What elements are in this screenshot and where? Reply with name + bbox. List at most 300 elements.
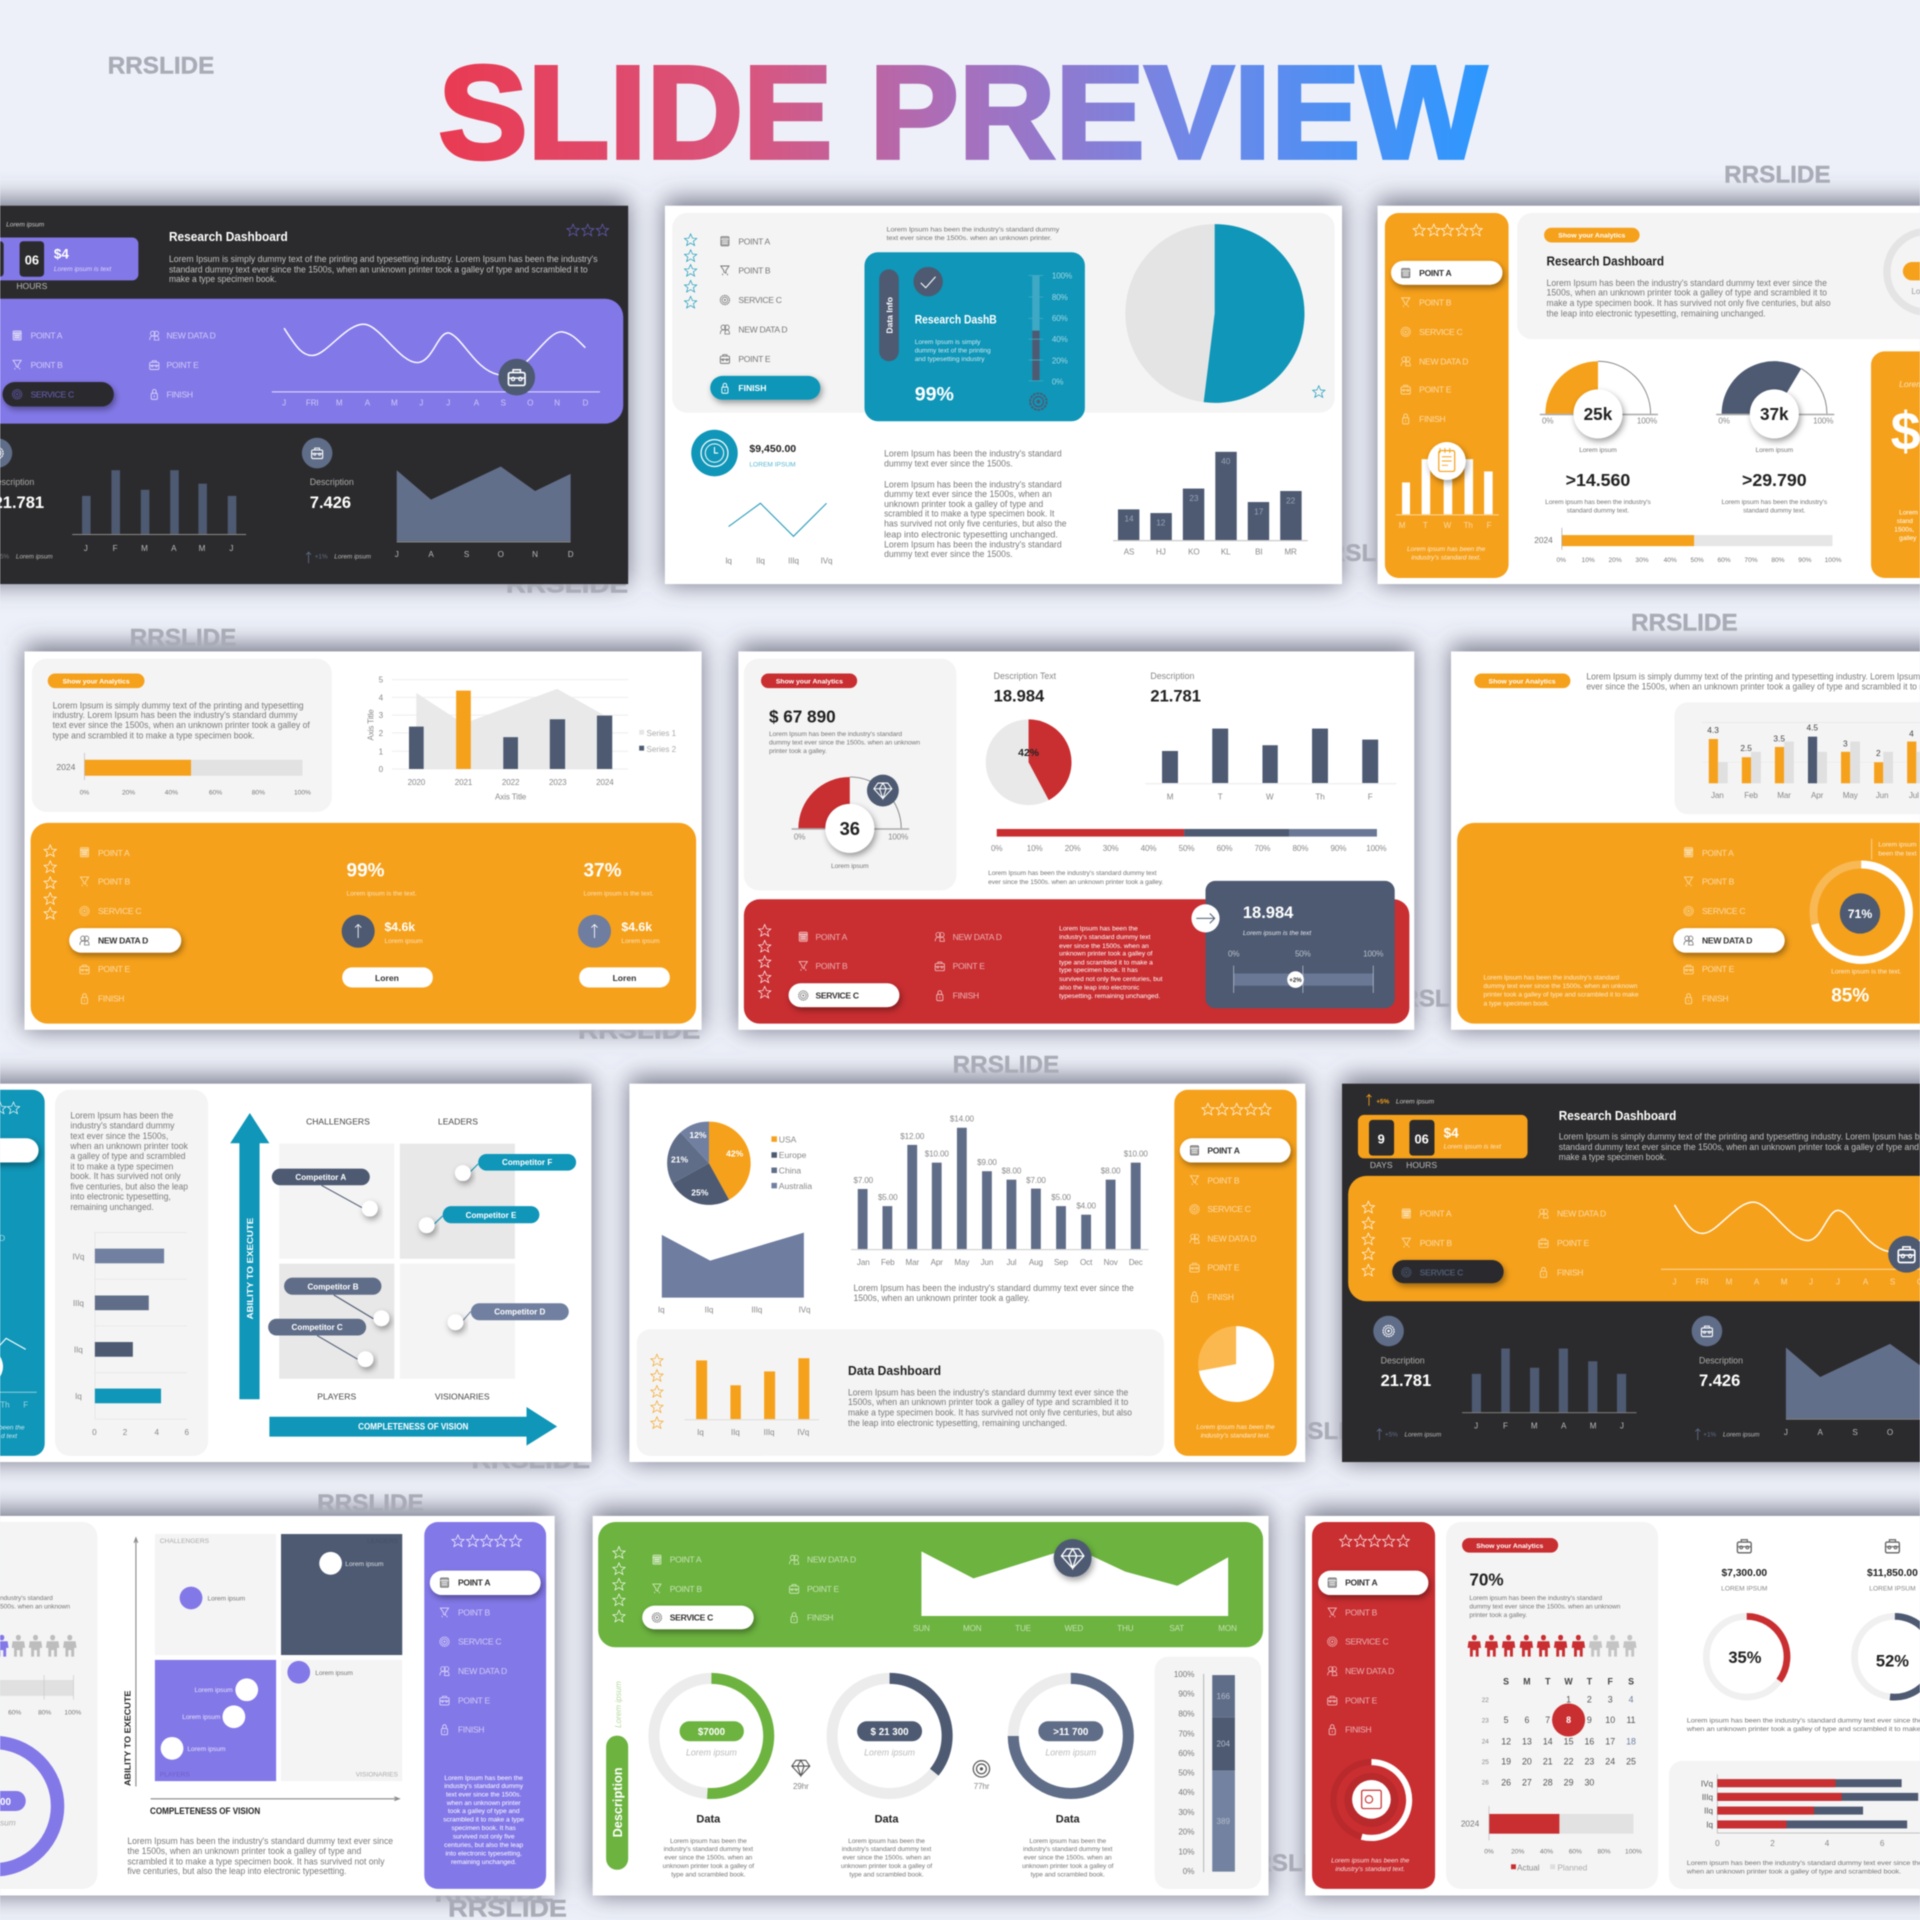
calendar: 23 bbox=[1584, 1756, 1594, 1766]
purple sidebar: scrambled it to make a type bbox=[443, 1817, 524, 1824]
green panel: NEW DATA D bbox=[807, 1555, 856, 1565]
text and horizontal bars card: a galley of type and scrambled bbox=[70, 1151, 186, 1161]
axes: ABILITY TO EXECUTE bbox=[122, 1690, 132, 1786]
orange sidebar: POINT E bbox=[1207, 1263, 1240, 1273]
bar chart: 14 bbox=[1124, 514, 1134, 524]
area chart: Iq bbox=[658, 1306, 664, 1315]
donut: >11 700: unknown printer took a galley of bbox=[1022, 1863, 1114, 1870]
progress bar bbox=[1534, 528, 1842, 564]
data dashboard card: IIIq bbox=[764, 1428, 774, 1437]
area chart: S bbox=[1852, 1428, 1858, 1437]
calendar: 25 bbox=[1626, 1756, 1636, 1766]
quadrants: VISIONARIES bbox=[356, 1772, 399, 1779]
donut: $7000: Lorem ipsum has been the bbox=[670, 1838, 747, 1845]
competitor B bbox=[284, 1278, 389, 1326]
title: SLIDE PREVIEW bbox=[438, 39, 1487, 187]
description bbox=[127, 1836, 393, 1876]
calendar: 7 bbox=[1545, 1715, 1550, 1725]
stat 37%: 37% bbox=[583, 861, 622, 882]
panel: slide 8 data dashboard bbox=[629, 1084, 1305, 1462]
donut: $7000: type and scrambled book. bbox=[671, 1871, 746, 1878]
monthly bar chart: $5.00 bbox=[878, 1193, 898, 1202]
calendar: 23 bbox=[1482, 1717, 1489, 1724]
calendar: 19 bbox=[1501, 1756, 1511, 1766]
text and horizontal bars card: it to make a type specimen bbox=[70, 1161, 173, 1171]
watermarks: RRSLIDE bbox=[1237, 1850, 1343, 1877]
gauge 37k: Lorem ipsum has been the industry's bbox=[1721, 499, 1828, 506]
gauge 37k bbox=[1716, 361, 1834, 514]
description: make a type specimen book. bbox=[169, 274, 277, 284]
bar chart: M bbox=[1531, 1421, 1538, 1430]
area chart: IIIq bbox=[751, 1306, 762, 1315]
horizontal stacked bars card bbox=[1669, 1761, 1920, 1889]
area chart bbox=[658, 1233, 810, 1315]
analytics card: text ever since the 1500s, when an unknown printer took a galley of bbox=[53, 720, 310, 730]
analytics card: Lorem Ipsum has been the industry's standard bbox=[769, 731, 902, 738]
donut chart: 85% bbox=[1831, 986, 1869, 1007]
stacked column chart: 166 bbox=[1217, 1692, 1231, 1701]
calendar: 11 bbox=[1626, 1715, 1636, 1725]
combo chart: Axis Title bbox=[495, 793, 527, 802]
monthly bar chart: $10.00 bbox=[925, 1150, 949, 1159]
legend: China bbox=[779, 1165, 801, 1175]
orange panel: NEW DATA D bbox=[1702, 935, 1752, 945]
area chart: MON bbox=[963, 1624, 982, 1633]
stacked column chart: 204 bbox=[1217, 1740, 1231, 1749]
calendar bbox=[1482, 1676, 1636, 1787]
red panel: POINT E bbox=[953, 961, 985, 971]
line chart: A bbox=[1754, 1277, 1760, 1286]
safe donut bbox=[1333, 1762, 1409, 1838]
calendar card: dummy text ever since the 1500s. when an unknown bbox=[1469, 1603, 1621, 1610]
text and horizontal bars card: Iq bbox=[75, 1392, 82, 1401]
progress bar: 60% bbox=[1569, 1848, 1582, 1855]
line chart: J bbox=[282, 398, 286, 407]
stacked progress bar: 100% bbox=[1366, 844, 1386, 853]
purple sidebar: SERVICE C bbox=[458, 1637, 501, 1647]
stat with clock icon: LOREM IPSUM bbox=[749, 462, 796, 469]
red sidebar: POINT E bbox=[1345, 1695, 1378, 1705]
dark card: 18.984 bbox=[1243, 903, 1294, 922]
teal sidebar bbox=[0, 1090, 45, 1456]
menu: FINISH bbox=[738, 383, 766, 393]
progress bar: 2024 bbox=[1461, 1818, 1480, 1828]
green panel: POINT B bbox=[670, 1584, 702, 1594]
analytics card: 100% bbox=[888, 832, 908, 841]
red sidebar: POINT A bbox=[1345, 1578, 1377, 1588]
orange panel: Lorem Ipsum has been the industry's standard bbox=[1483, 975, 1620, 982]
stat 7.426 bbox=[302, 438, 371, 563]
teal card: Research DashB bbox=[915, 313, 997, 326]
line chart: A bbox=[1863, 1277, 1869, 1286]
donut: $7000: $7000 bbox=[698, 1727, 726, 1738]
data dashboard card: make a type specimen book. It has survived not only five centuries, but also bbox=[848, 1408, 1132, 1418]
orange sidebar bbox=[1174, 1090, 1297, 1456]
green panel: FINISH bbox=[807, 1613, 833, 1623]
gauge 25k: Lorem ipsum has been the industry's bbox=[1545, 499, 1652, 506]
stars bbox=[684, 234, 697, 308]
chart caption bbox=[853, 1283, 1134, 1303]
sidebar: NEW DATA D bbox=[1419, 356, 1468, 366]
gauge 25k: >14.560 bbox=[1566, 470, 1630, 490]
gauge 37k: >29.790 bbox=[1742, 470, 1807, 490]
combo chart: Axis Title bbox=[366, 709, 375, 740]
stacked column chart: 80% bbox=[1178, 1709, 1194, 1718]
area chart: D bbox=[568, 550, 574, 559]
combo chart: 4 bbox=[379, 693, 384, 702]
calendar: 16 bbox=[1584, 1736, 1594, 1746]
progress bar: 60% bbox=[1717, 557, 1731, 564]
data dashboard card: IIq bbox=[731, 1428, 740, 1437]
line chart bbox=[725, 503, 832, 565]
stat with clock icon bbox=[691, 430, 796, 476]
orange panel: POINT B bbox=[1702, 877, 1735, 887]
arrow: ability to execute: ABILITY TO EXECUTE bbox=[245, 1217, 255, 1319]
red panel: SERVICE C bbox=[816, 991, 859, 1001]
calendar: 5 bbox=[1504, 1715, 1509, 1725]
calendar: T bbox=[1545, 1676, 1551, 1686]
stats: 21.781 bbox=[1150, 687, 1201, 706]
quadrants: Lorem ipsum bbox=[345, 1561, 384, 1568]
panel: slide 7 competitor quadrant bbox=[0, 1084, 591, 1462]
stat 21.781: 21.781 bbox=[1381, 1371, 1431, 1390]
top panel: Lorem Ipsum has been the industry's standard dummy text ever since the bbox=[1547, 278, 1827, 288]
line chart: IIIq bbox=[788, 556, 799, 565]
teal card: 40% bbox=[1052, 335, 1068, 344]
monthly bar chart: $12.00 bbox=[900, 1132, 925, 1141]
description bbox=[1559, 1131, 1920, 1162]
grouped bar chart: 2 bbox=[1876, 748, 1881, 758]
quadrants: LEADERS bbox=[367, 1538, 399, 1545]
monthly bar chart: Sep bbox=[1054, 1258, 1069, 1267]
orange panel bbox=[1348, 1176, 1920, 1301]
analytics card: 36 bbox=[840, 818, 860, 839]
combo chart: Series 1 bbox=[647, 729, 677, 738]
stacked progress bar: 70% bbox=[1255, 844, 1270, 853]
purple sidebar: text ever since the 1500s. bbox=[446, 1791, 521, 1798]
calendar: 20 bbox=[1522, 1756, 1532, 1766]
competitor A bbox=[272, 1169, 378, 1217]
stacked column chart: 0% bbox=[1183, 1867, 1194, 1876]
donut chart: been the text bbox=[1878, 850, 1917, 857]
bar chart: Th bbox=[1315, 793, 1325, 802]
calendar: 2 bbox=[1587, 1695, 1592, 1705]
body text bbox=[884, 449, 1067, 559]
pie chart bbox=[986, 719, 1072, 805]
watermarks: RRSLIDE bbox=[435, 1881, 553, 1908]
pie chart bbox=[667, 1122, 751, 1205]
text and horizontal bars card: text ever since the 1500s, bbox=[70, 1131, 168, 1141]
orange card: 1500s, bbox=[1894, 526, 1914, 533]
donut chart bbox=[1813, 839, 1917, 1007]
watermarks: RRSLIDE bbox=[1310, 540, 1417, 567]
analytics card: industry. Lorem Ipsum has been the industry's standard dummy bbox=[53, 710, 298, 720]
calendar: 25 bbox=[1482, 1759, 1489, 1766]
stacked column chart: 30% bbox=[1178, 1808, 1194, 1817]
countdown box: $4 bbox=[1444, 1126, 1459, 1141]
combo chart: 2020 bbox=[408, 778, 426, 787]
bar chart: 40 bbox=[1221, 456, 1231, 466]
monthly bar chart: $14.00 bbox=[950, 1115, 974, 1124]
people pictogram bbox=[1468, 1635, 1637, 1657]
gauge 37k: 0% bbox=[1718, 417, 1730, 426]
donut: >11 700: >11 700 bbox=[1053, 1727, 1089, 1738]
analytics card: $ 67 890 bbox=[769, 706, 836, 726]
axes: COMPLETENESS OF VISION bbox=[150, 1806, 260, 1816]
stacked column chart: 50% bbox=[1178, 1769, 1194, 1778]
purple sidebar: NEW DATA D bbox=[458, 1666, 507, 1676]
monthly bar chart: Jul bbox=[1006, 1258, 1017, 1267]
calendar: 21 bbox=[1543, 1756, 1553, 1766]
countdown box: $4 bbox=[54, 246, 69, 261]
monthly bar chart: $7.00 bbox=[1026, 1176, 1046, 1185]
arrow: completeness of vision: COMPLETENESS OF VISION bbox=[358, 1422, 468, 1432]
grouped bar chart: 2.5 bbox=[1740, 743, 1752, 753]
calendar: 24 bbox=[1605, 1756, 1615, 1766]
area chart: J bbox=[1784, 1428, 1788, 1437]
data dashboard card: IVq bbox=[797, 1428, 809, 1437]
calendar: 29 bbox=[1564, 1777, 1574, 1787]
intro text bbox=[887, 226, 1060, 242]
orange panel: POINT E bbox=[98, 964, 131, 974]
data dashboard card: Data Dashboard bbox=[848, 1363, 941, 1378]
line chart: Iq bbox=[725, 556, 732, 565]
stat 7.426: Lorem ipsum bbox=[1723, 1431, 1760, 1438]
teal card: 20% bbox=[1052, 357, 1068, 366]
gauge 25k: Lorem ipsum bbox=[1579, 447, 1617, 454]
bar chart: M bbox=[1590, 1421, 1597, 1430]
menu: NEW DATA D bbox=[167, 331, 216, 341]
panel: slide 4 analytics orange bbox=[24, 651, 702, 1030]
stat 37% bbox=[578, 861, 670, 988]
watermarks: RRSLIDE bbox=[108, 52, 214, 79]
countdown box: Lorem ipsum is text bbox=[54, 266, 112, 273]
teal sidebar: F bbox=[23, 1401, 28, 1410]
menu: POINT A bbox=[738, 236, 770, 246]
line chart: A bbox=[474, 398, 480, 407]
stacked progress bar: 40% bbox=[1141, 844, 1156, 853]
calendar: 3 bbox=[1608, 1695, 1613, 1705]
orange sidebar: Lorem ipsum has been the bbox=[1196, 1424, 1275, 1431]
purple sidebar: when an unknown printer bbox=[446, 1800, 521, 1807]
description: Lorem ipsum has been the industry's standard dummy text ever since the 1500s. bbox=[1687, 1717, 1920, 1724]
stacked column chart: 60% bbox=[1178, 1749, 1194, 1758]
calendar: 22 bbox=[1482, 1697, 1489, 1704]
body text: Lorem Ipsum has been the industry's standard bbox=[884, 539, 1062, 549]
line chart: J bbox=[446, 398, 450, 407]
competitor A: Competitor A bbox=[295, 1173, 346, 1182]
monthly bar chart: $10.00 bbox=[1124, 1150, 1148, 1159]
grouped bar chart: Jun bbox=[1876, 791, 1888, 800]
stat $11,850.00 bbox=[1867, 1540, 1918, 1593]
sidebar: POINT A bbox=[1419, 268, 1452, 278]
axes bbox=[122, 1538, 399, 1816]
text and horizontal bars card: IVq bbox=[72, 1252, 84, 1261]
calendar card: Lorem ipsum has been the industry's standard bbox=[1469, 1595, 1602, 1602]
monthly bar chart: Apr bbox=[931, 1258, 943, 1267]
red panel: type specimen book. It has bbox=[1059, 967, 1139, 974]
panel: slide 6 orange grouped bars bbox=[1451, 651, 1920, 1030]
left card bbox=[0, 1522, 97, 1889]
tag: Show your Analytics bbox=[1489, 678, 1556, 685]
orange panel: dummy text ever since the 1500s. when an unknown bbox=[1483, 983, 1638, 990]
orange panel: POINT B bbox=[1420, 1238, 1452, 1248]
analytics card: Show your Analytics bbox=[776, 678, 843, 685]
progress bar: 10% bbox=[1582, 557, 1595, 564]
donut: >11 700 bbox=[1013, 1678, 1128, 1878]
dark card: 100% bbox=[1363, 949, 1383, 958]
pie chart bbox=[1125, 224, 1304, 403]
top panel: make a type specimen book. It has survived not only five centuries, but also bbox=[1547, 298, 1831, 308]
progress bar: 70% bbox=[1744, 557, 1758, 564]
line chart: O bbox=[527, 398, 533, 407]
sidebar: SERVICE C bbox=[1419, 327, 1463, 337]
monthly bar chart: Mar bbox=[905, 1258, 919, 1267]
progress bar: 0% bbox=[1556, 557, 1566, 564]
purple sidebar: into electronic typesetting, bbox=[445, 1850, 522, 1857]
menu: SERVICE C bbox=[31, 389, 74, 399]
text and horizontal bars card: remaining unchanged. bbox=[70, 1202, 154, 1212]
calendar: 10 bbox=[1605, 1715, 1615, 1725]
analytics card: 60% bbox=[209, 790, 222, 797]
grouped bar chart: 3 bbox=[1843, 738, 1848, 748]
stacked progress bar: Lorem Ipsum has been the industry's standard dummy text bbox=[988, 870, 1157, 877]
stat 99%: Lorem ipsum is the text. bbox=[347, 891, 417, 898]
combo chart: 3 bbox=[379, 711, 384, 720]
body text: dummy text ever since the 1500s. bbox=[884, 549, 1013, 559]
orange panel: NEW DATA D bbox=[98, 935, 148, 945]
grouped bar chart: Feb bbox=[1744, 791, 1758, 800]
grouped bar chart: 3.5 bbox=[1773, 733, 1785, 743]
combo chart: 1 bbox=[379, 747, 384, 756]
stat 7.426: Lorem ipsum bbox=[334, 553, 371, 560]
donut: $21 300: ever since the 1500s. when an bbox=[843, 1854, 931, 1861]
line chart: J bbox=[1673, 1277, 1677, 1286]
gauge 25k: 25k bbox=[1584, 404, 1613, 424]
purple sidebar: took a galley of type and bbox=[448, 1808, 520, 1815]
quadrants: VISIONARIES bbox=[435, 1392, 490, 1402]
orange panel: printer took a galley of type and scrambled it to make bbox=[1483, 992, 1639, 999]
horizontal stacked bars card: Iq bbox=[1706, 1821, 1713, 1830]
area chart: O bbox=[498, 550, 504, 559]
analytics card: dummy text ever since the 1500s. when an unknown bbox=[769, 739, 920, 746]
ring 35%: 35% bbox=[1728, 1648, 1762, 1667]
orange panel: SERVICE C bbox=[1702, 906, 1745, 916]
analytics card: printer took a galley. bbox=[769, 748, 827, 755]
area chart: THU bbox=[1117, 1624, 1134, 1633]
stat 7.426: 7.426 bbox=[310, 493, 351, 512]
stat 7.426: +1% bbox=[1703, 1431, 1717, 1438]
donut: $7000: unknown printer took a galley of bbox=[663, 1863, 754, 1870]
text and horizontal bars card: IIIq bbox=[73, 1299, 84, 1308]
stat 21.781 bbox=[1373, 1316, 1441, 1440]
pie chart: 21% bbox=[671, 1155, 689, 1165]
progress bar: 0% bbox=[1484, 1848, 1494, 1855]
description: scrambled it to make a type specimen book. It has survived not only bbox=[127, 1856, 385, 1866]
grouped bar chart: Apr bbox=[1811, 791, 1824, 800]
gauge 25k: 0% bbox=[1542, 417, 1553, 426]
stat 37%: Lorem ipsum bbox=[621, 938, 660, 945]
teal card: and typesetting industry bbox=[915, 356, 985, 363]
body text: unknown printer took a galley of type and bbox=[884, 499, 1043, 509]
icon: target 77hr bbox=[973, 1761, 990, 1791]
bar chart bbox=[1146, 729, 1397, 802]
menu: POINT A bbox=[31, 331, 63, 341]
stacked column chart: 40% bbox=[1178, 1788, 1194, 1797]
combo chart: 2021 bbox=[455, 778, 473, 787]
grouped bar chart: 4 bbox=[1909, 729, 1914, 739]
horizontal stacked bars card: IIq bbox=[1704, 1806, 1713, 1815]
sidebar: M bbox=[1399, 521, 1406, 530]
monthly bar chart bbox=[851, 1115, 1149, 1267]
donut chart: Lorem ipsum is the text. bbox=[1831, 968, 1902, 975]
teal card: 80% bbox=[1052, 293, 1068, 302]
red sidebar: NEW DATA D bbox=[1345, 1666, 1394, 1676]
stars bbox=[567, 224, 609, 236]
red sidebar: POINT B bbox=[1345, 1608, 1378, 1618]
combo chart: 0 bbox=[379, 765, 384, 774]
line chart: M bbox=[336, 398, 343, 407]
description bbox=[1686, 1717, 1920, 1733]
bar chart: 12 bbox=[1156, 517, 1166, 527]
green panel: POINT E bbox=[807, 1584, 839, 1594]
calendar: 27 bbox=[1522, 1777, 1532, 1787]
calendar card bbox=[1446, 1522, 1658, 1889]
panel: slide 11 green donuts bbox=[593, 1516, 1269, 1896]
ring 52% bbox=[1854, 1616, 1920, 1697]
bar chart bbox=[72, 470, 246, 553]
heading: Research Dashboard bbox=[169, 229, 288, 244]
calendar: 14 bbox=[1543, 1736, 1553, 1746]
sidebar: industry's standard text. bbox=[1411, 555, 1481, 562]
calendar: 15 bbox=[1564, 1736, 1574, 1746]
text and horizontal bars card: five centuries, but also the leap bbox=[70, 1182, 188, 1192]
calendar: 26 bbox=[1482, 1780, 1489, 1787]
line chart: M bbox=[1781, 1277, 1788, 1286]
progress bar: Actual bbox=[1517, 1863, 1540, 1872]
donut: $7000 bbox=[654, 1678, 769, 1878]
grouped bar chart bbox=[1674, 702, 1920, 814]
horizontal stacked bars card: when an unknown printer took a galley of type and scrambled book. bbox=[1686, 1868, 1901, 1875]
purple sidebar: industry's standard dummy bbox=[444, 1783, 524, 1790]
text and horizontal bars card: 2 bbox=[123, 1428, 128, 1437]
bar chart bbox=[1113, 452, 1308, 557]
donut: $21 300: $ 21 300 bbox=[871, 1727, 909, 1738]
text and horizontal bars card: industry's standard dummy bbox=[70, 1120, 175, 1130]
analytics card: 80% bbox=[252, 790, 265, 797]
stat 99%: Lorem ipsum bbox=[384, 938, 423, 945]
bar chart bbox=[1462, 1349, 1637, 1430]
countdown box: 06 bbox=[1414, 1132, 1429, 1147]
area chart: IIq bbox=[705, 1306, 713, 1315]
progress bar: 80% bbox=[1597, 1848, 1611, 1855]
bar chart: A bbox=[171, 544, 177, 553]
donut: >11 700: industry's standard dummy text bbox=[1023, 1846, 1113, 1853]
monthly bar chart: Feb bbox=[881, 1258, 895, 1267]
body text: Lorem Ipsum has been the industry's standard bbox=[884, 479, 1062, 489]
competitor B: Competitor B bbox=[307, 1282, 359, 1291]
area chart: J bbox=[395, 550, 399, 559]
monthly bar chart: $7.00 bbox=[853, 1176, 874, 1185]
body text: scrambled it to make a type specimen book. It bbox=[884, 509, 1055, 519]
teal card: 99% bbox=[915, 383, 954, 405]
pie chart: 12% bbox=[689, 1130, 707, 1140]
red panel: unknown printer took a galley of bbox=[1059, 951, 1153, 958]
combo chart: 2024 bbox=[596, 778, 614, 787]
monthly bar chart: May bbox=[954, 1258, 970, 1267]
sidebar: W bbox=[1444, 521, 1452, 530]
dark card: Lorem ipsum is the text bbox=[1243, 930, 1312, 937]
